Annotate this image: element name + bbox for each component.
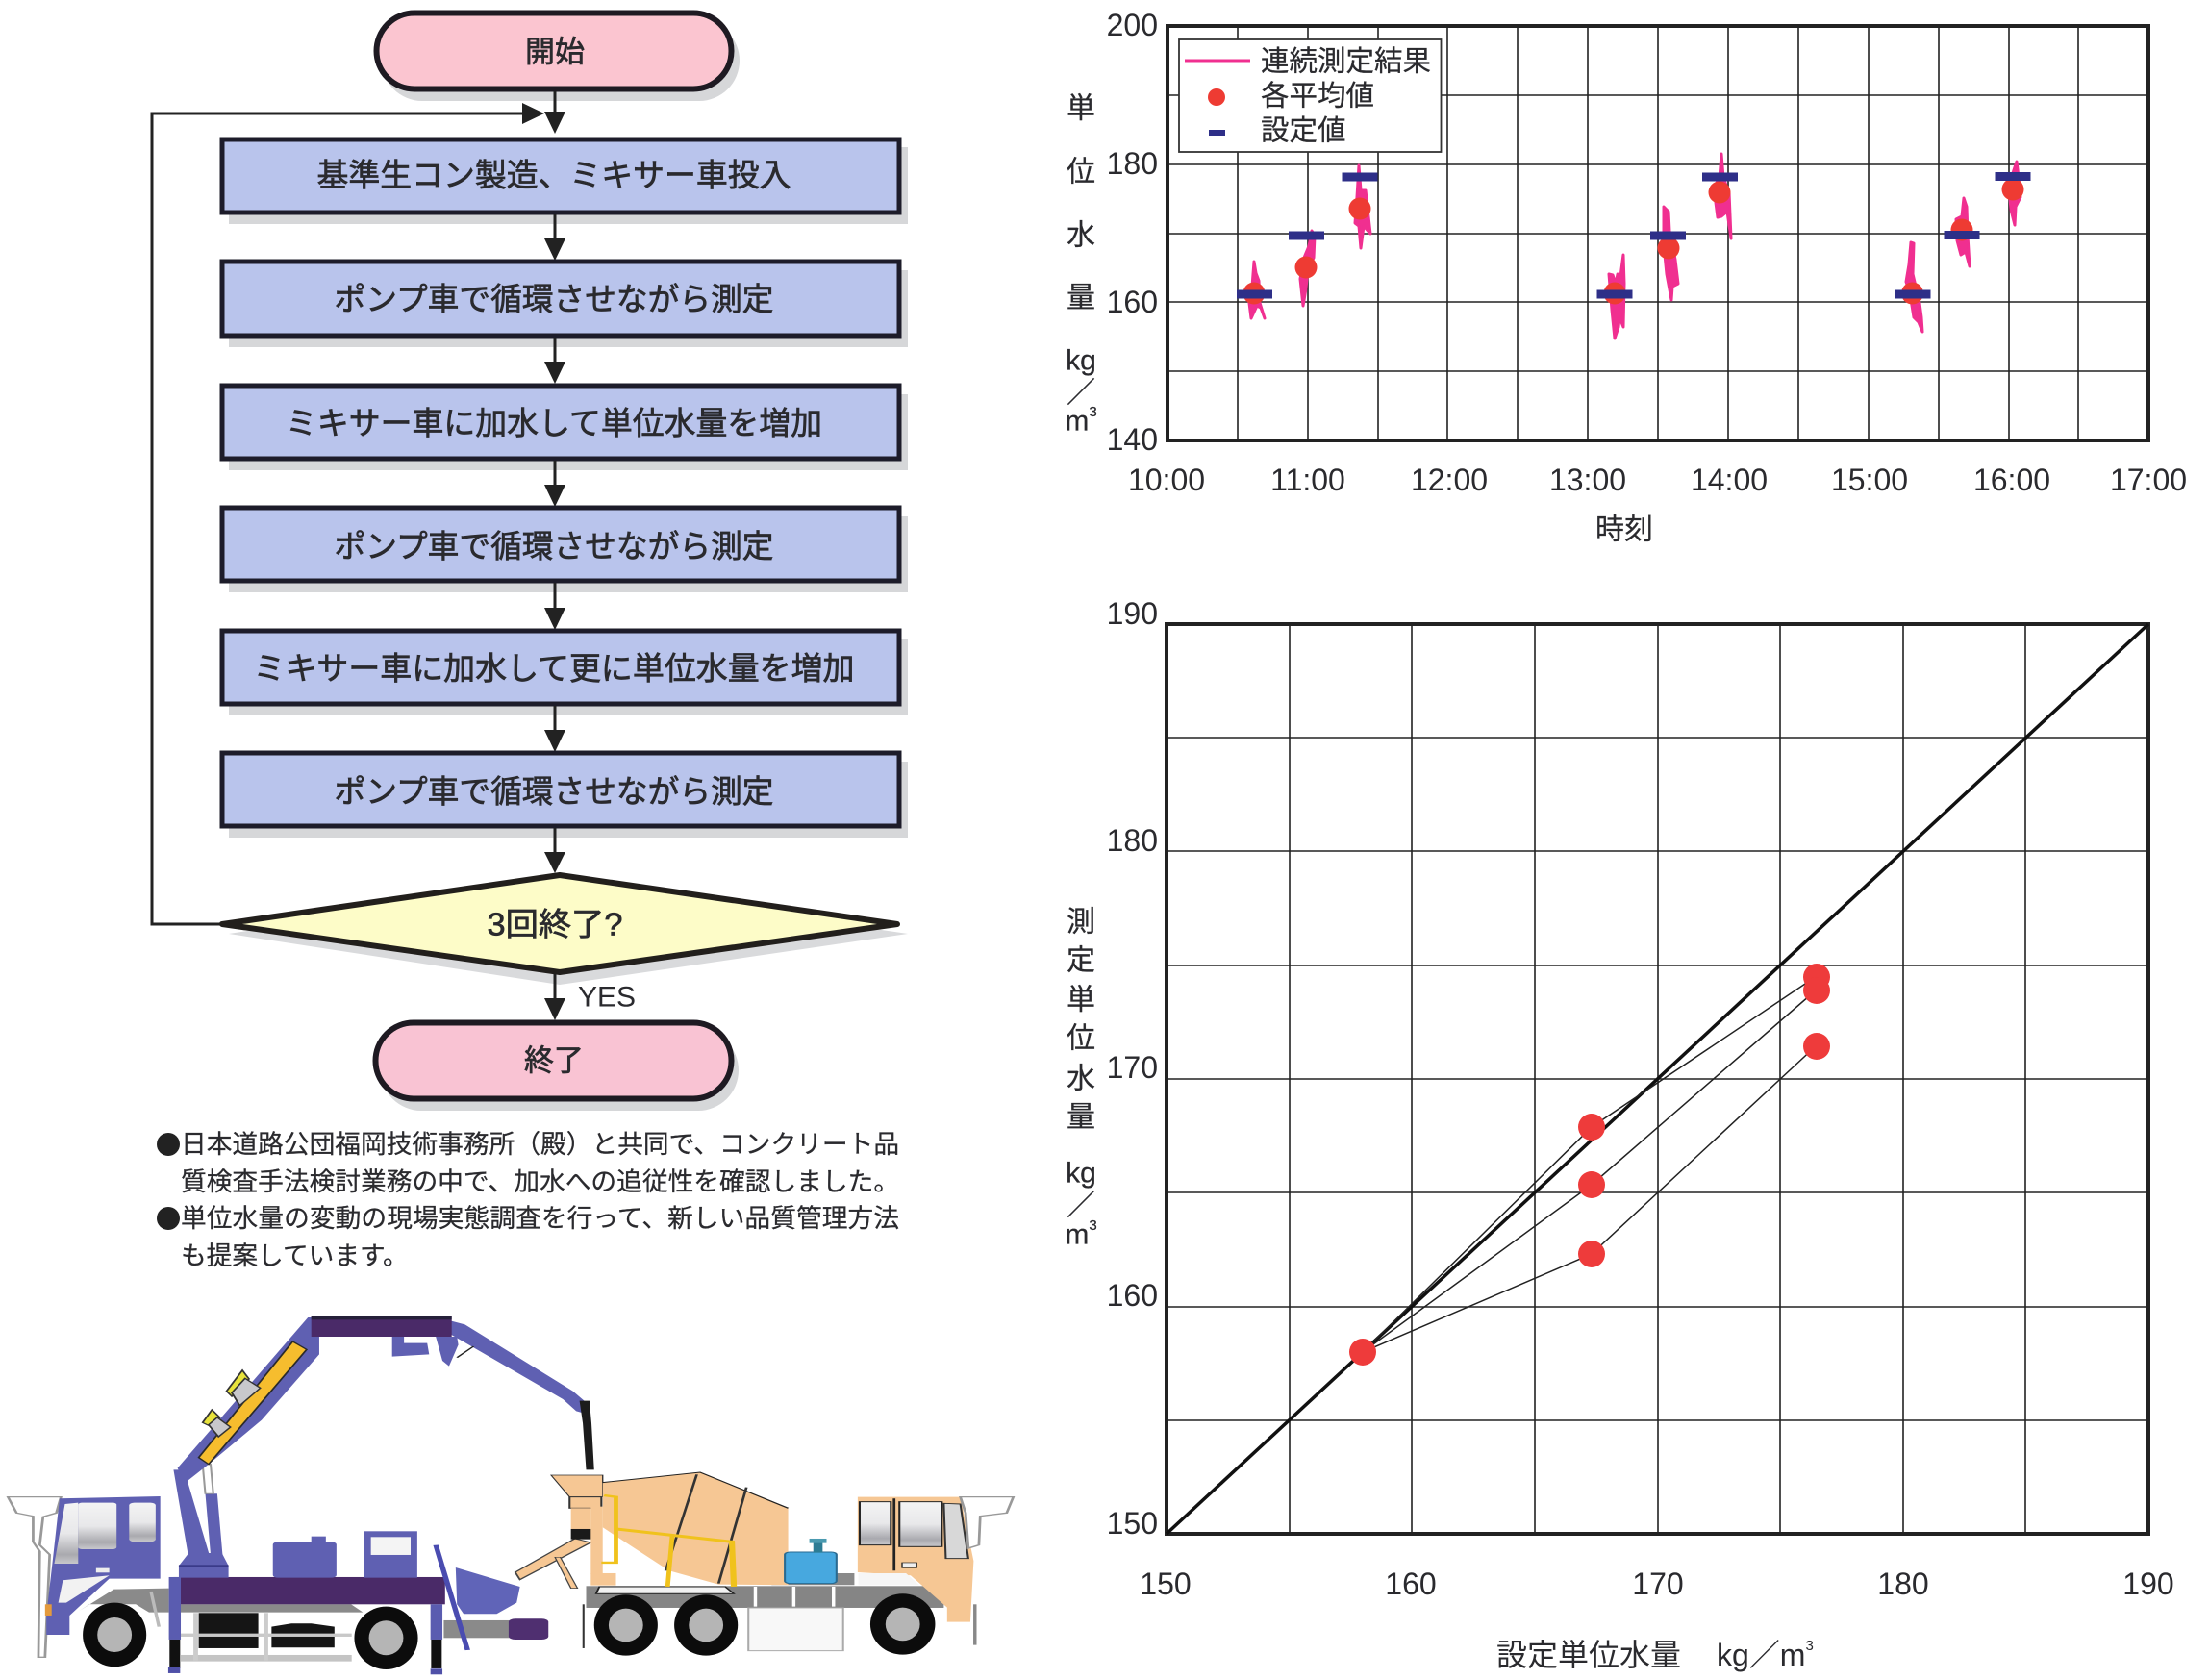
y axis title [1065, 92, 1097, 437]
end terminator [375, 1023, 739, 1111]
step 4: ポンプ車で循環させながら測定 [335, 529, 773, 564]
y axis title: ／ [1067, 377, 1095, 410]
y axis title: m [1065, 406, 1089, 437]
chart frame [1167, 26, 2148, 440]
line 2: 質検査手法検討業務の中で、加水への追従性を確認しました。 [181, 1167, 899, 1196]
step 1 [222, 139, 908, 224]
x axis tick labels: 10:00 [1128, 463, 1205, 497]
y axis title: 量 [1067, 283, 1095, 313]
x axis tick labels: 16:00 [1973, 463, 2050, 497]
chart grid [1167, 26, 2148, 440]
y axis title: 量 [1067, 1102, 1095, 1133]
y axis title: 単 [1067, 92, 1095, 125]
arrow: decision to end [544, 974, 565, 1020]
arrow: start to step 1 [544, 91, 565, 134]
y axis tick labels: 160 [1107, 1278, 1158, 1313]
flowchart [152, 13, 908, 1111]
step 2: ポンプ車で循環させながら測定 [335, 281, 773, 317]
x axis title: 時刻 [1595, 514, 1653, 546]
continuous measurement traces [1249, 154, 2021, 339]
arrow: step 2 to step 3 [544, 338, 565, 384]
chart frame [1167, 624, 2148, 1534]
x axis tick labels: 11:00 [1270, 463, 1345, 497]
y axis tick labels: 170 [1107, 1050, 1158, 1085]
y axis title: 3 [1089, 404, 1097, 419]
x axis tick labels: 14:00 [1691, 463, 1768, 497]
loop-back arrow [152, 103, 544, 924]
y axis title: ／ [1067, 1191, 1095, 1221]
line 4: も提案しています。 [181, 1241, 409, 1270]
legend [1179, 39, 1441, 152]
step 3 [222, 386, 908, 470]
legend: 各平均値 [1261, 81, 1374, 112]
x axis title: 3 [1805, 1637, 1814, 1654]
y axis tick labels: 200 [1107, 8, 1158, 42]
illustration: pump truck and mixer truck [8, 1316, 1014, 1674]
y axis tick labels: 180 [1107, 823, 1158, 858]
y axis tick labels: 150 [1107, 1506, 1158, 1541]
arrow: step 4 to step 5 [544, 583, 565, 630]
start terminator [377, 13, 740, 101]
y axis tick labels: 190 [1107, 596, 1158, 631]
x axis tick labels: 15:00 [1831, 463, 1908, 497]
step 2 [222, 262, 908, 347]
pump truck [8, 1316, 594, 1674]
decision diamond: 3回終了? [487, 906, 623, 942]
y axis title: 水 [1067, 219, 1095, 252]
legend: 連続測定結果 [1261, 46, 1431, 77]
y axis title: 単 [1067, 985, 1095, 1016]
y axis title: 位 [1067, 156, 1095, 188]
mean markers [1243, 179, 2023, 304]
step 6: ポンプ車で循環させながら測定 [335, 773, 773, 810]
chart grid [1167, 624, 2148, 1534]
mixer truck [515, 1472, 1014, 1656]
arrow: step 3 to step 4 [544, 461, 565, 507]
y axis tick labels: 140 [1107, 422, 1158, 457]
x axis tick labels [1140, 1567, 2174, 1601]
y axis title: 水 [1067, 1064, 1095, 1094]
y axis title: 定 [1067, 944, 1095, 977]
YES label: YES [578, 981, 636, 1014]
y axis tick labels [1107, 8, 1158, 457]
description text block [157, 1130, 899, 1270]
set value markers [1237, 172, 2031, 298]
step 5: ミキサー車に加水して更に単位水量を増加 [254, 650, 854, 687]
y axis title: kg [1066, 1158, 1096, 1189]
y axis tick labels [1107, 596, 1158, 1541]
x axis tick labels: 170 [1632, 1567, 1684, 1601]
x axis tick labels: 160 [1385, 1567, 1437, 1601]
x axis tick labels: 13:00 [1549, 463, 1626, 497]
step 4 [222, 508, 908, 592]
x axis tick labels: 180 [1877, 1567, 1929, 1601]
decision diamond [222, 875, 908, 985]
step 6 [222, 753, 908, 838]
legend: 設定値 [1261, 115, 1346, 146]
arrow: step 1 to step 2 [544, 214, 565, 261]
line 3: 単位水量の変動の現場実態調査を行って、新しい品質管理方法 [181, 1204, 899, 1233]
y axis title: kg [1066, 344, 1096, 377]
line 1: 日本道路公団福岡技術事務所（殿）と共同で、コンクリート品 [181, 1130, 899, 1159]
y axis title: m [1065, 1219, 1089, 1250]
scatter chart [1065, 596, 2174, 1672]
bullet 1 [157, 1133, 180, 1156]
x axis tick labels: 190 [2122, 1567, 2174, 1601]
arrow: step 5 to step 6 [544, 706, 565, 752]
y axis title: 位 [1067, 1023, 1095, 1054]
bullet 2 [157, 1207, 180, 1230]
step 1: 基準生コン製造、ミキサー車投入 [317, 158, 791, 192]
x axis tick labels: 12:00 [1411, 463, 1488, 497]
x axis title: 設定単位水量 [1496, 1638, 1681, 1672]
x axis title: kg／m [1717, 1638, 1805, 1672]
x axis title [1496, 1637, 1814, 1672]
y axis title: 測 [1067, 906, 1095, 939]
start terminator: 開始 [525, 35, 585, 69]
y axis title [1065, 906, 1097, 1250]
one-to-one reference line [1167, 624, 2148, 1534]
y axis title: 3 [1089, 1217, 1097, 1233]
step 3: ミキサー車に加水して単位水量を増加 [286, 406, 822, 440]
y axis tick labels: 180 [1107, 146, 1158, 181]
connecting lines [1363, 976, 1817, 1352]
end terminator: 終了 [524, 1044, 584, 1077]
x axis tick labels: 150 [1140, 1567, 1192, 1601]
time series chart [1065, 8, 2187, 546]
arrow: step 6 to decision [544, 828, 565, 873]
data points [1349, 964, 1830, 1366]
step 5 [222, 631, 908, 715]
y axis tick labels: 160 [1107, 285, 1158, 319]
x axis tick labels [1128, 463, 2187, 497]
x axis tick labels: 17:00 [2110, 463, 2187, 497]
